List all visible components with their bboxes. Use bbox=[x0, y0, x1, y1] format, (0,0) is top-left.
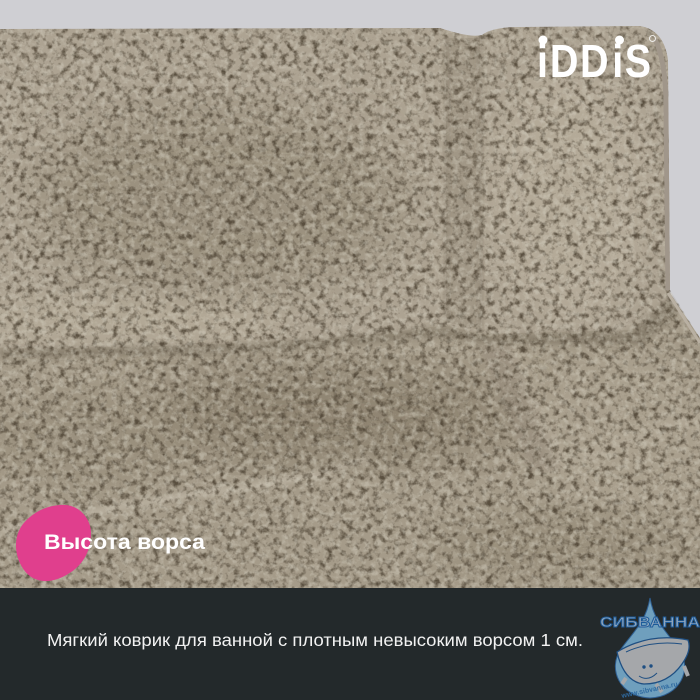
tonal shading bbox=[7, 100, 672, 572]
shadow between rugs bbox=[0, 296, 680, 357]
registered mark bbox=[650, 36, 656, 42]
bathtub face bbox=[642, 665, 646, 669]
caption text: Мягкий коврик для ванной с плотным невысоким ворсом 1 см. bbox=[47, 630, 583, 650]
bound rug edge bbox=[655, 40, 668, 290]
pink callout blob bbox=[16, 505, 91, 581]
water drop bbox=[615, 598, 685, 698]
callout label: Высота ворса bbox=[44, 531, 205, 554]
url: www.sibvanna.ru bbox=[620, 681, 678, 700]
logo: iDDiS: iDDiS bbox=[537, 36, 651, 88]
light ridges on lower rug bbox=[0, 458, 370, 532]
bottom caption bar bbox=[0, 588, 700, 700]
rolled top rug bbox=[0, 26, 670, 348]
woven strip on lower rug bbox=[486, 349, 556, 468]
bathtub bbox=[617, 638, 689, 684]
brand name: СИБВАННА bbox=[600, 614, 700, 631]
woven strip on top rug bbox=[446, 38, 481, 330]
watermark logo: Sibvanna bbox=[600, 598, 700, 700]
lower rug bbox=[0, 290, 700, 588]
